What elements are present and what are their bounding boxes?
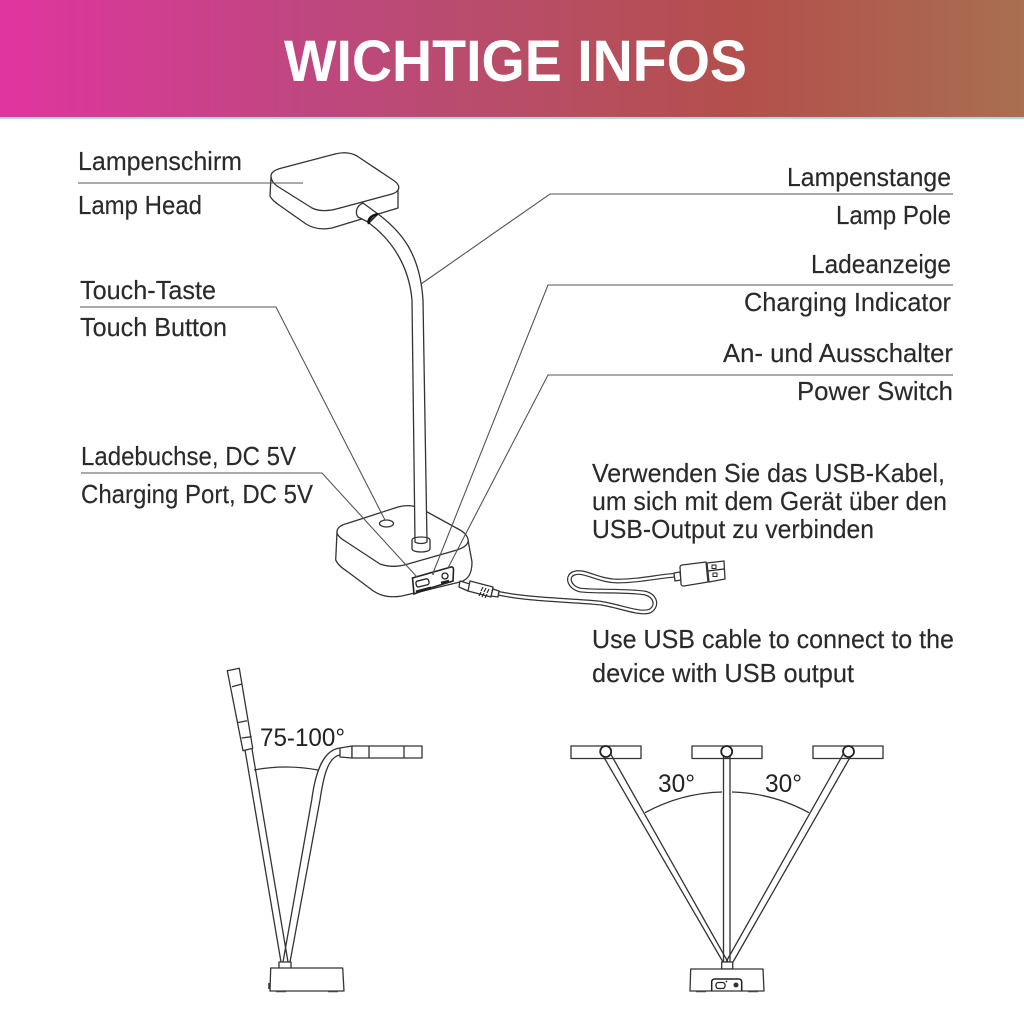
callout: Ladebuchse: Ladebuchse, DC 5V xyxy=(81,441,297,471)
touch button xyxy=(380,520,394,527)
left pole xyxy=(602,751,728,962)
title: WICHTIGE INFOS xyxy=(284,29,747,94)
angle arc xyxy=(254,767,318,770)
bent pole xyxy=(283,748,340,962)
text block: English USB note: Use USB cable to connect to the xyxy=(592,624,954,654)
callout: Lampenschirm: Lampenschirm xyxy=(78,146,242,176)
angle arcs xyxy=(645,792,809,813)
barrel plug xyxy=(459,581,470,591)
text block: German USB note: USB-Output zu verbinden xyxy=(592,514,874,544)
callout: Lampenstange: Lamp Pole xyxy=(836,200,951,230)
pole socket xyxy=(412,537,430,552)
upright pole xyxy=(245,749,288,962)
text block: English USB note: device with USB output xyxy=(592,658,855,688)
side base xyxy=(269,962,344,992)
text block: German USB note xyxy=(592,458,947,544)
text block: English USB note xyxy=(592,624,954,688)
neck connector xyxy=(356,203,378,222)
header banner xyxy=(0,0,1024,119)
callout: Lampenstange: Lampenstange xyxy=(787,162,951,192)
angle label: 75-100° xyxy=(260,724,345,752)
text block: German USB note: Verwenden Sie das USB-Kabel, xyxy=(592,458,945,488)
USB plug xyxy=(674,572,681,581)
callout: Touch-Taste: Touch-Taste xyxy=(80,275,216,305)
front base xyxy=(690,962,764,992)
callout: Ladeanzeige: Ladeanzeige xyxy=(811,249,951,279)
callout: An- und Ausschalter xyxy=(448,338,953,568)
callout: An- und Ausschalter: Power Switch xyxy=(797,376,953,406)
angle labels: 30° xyxy=(658,770,695,798)
side view diagram: tilt range xyxy=(227,668,422,992)
front view diagram: swivel range xyxy=(571,746,883,992)
callout: Touch-Taste: Touch Button xyxy=(80,312,227,342)
lamp head xyxy=(270,153,399,229)
callout: Lampenschirm xyxy=(78,146,303,220)
lamp base xyxy=(336,506,472,597)
lamp pole xyxy=(369,214,427,542)
callout: Touch-Taste xyxy=(80,275,385,520)
right pole xyxy=(726,751,852,962)
heads xyxy=(571,746,641,758)
callout: Ladebuchse xyxy=(81,441,417,577)
callout: An- und Ausschalter: An- und Ausschalter xyxy=(723,338,953,368)
front view diagram: swivel range: 30° xyxy=(765,770,802,798)
horizontal head xyxy=(340,746,422,758)
main lamp illustration xyxy=(270,153,472,597)
callout: Lampenschirm: Lamp Head xyxy=(78,190,202,220)
callout: Ladeanzeige: Charging Indicator xyxy=(744,287,951,317)
callout: Lampenstange xyxy=(421,162,953,284)
callout: Ladebuchse: Charging Port, DC 5V xyxy=(81,479,314,509)
text block: German USB note: um sich mit dem Gerät über den xyxy=(592,486,947,516)
port panel xyxy=(412,567,454,594)
center pole xyxy=(724,752,730,962)
callout: Ladeanzeige xyxy=(433,249,953,573)
USB cable xyxy=(459,561,725,612)
upright head xyxy=(227,668,253,751)
